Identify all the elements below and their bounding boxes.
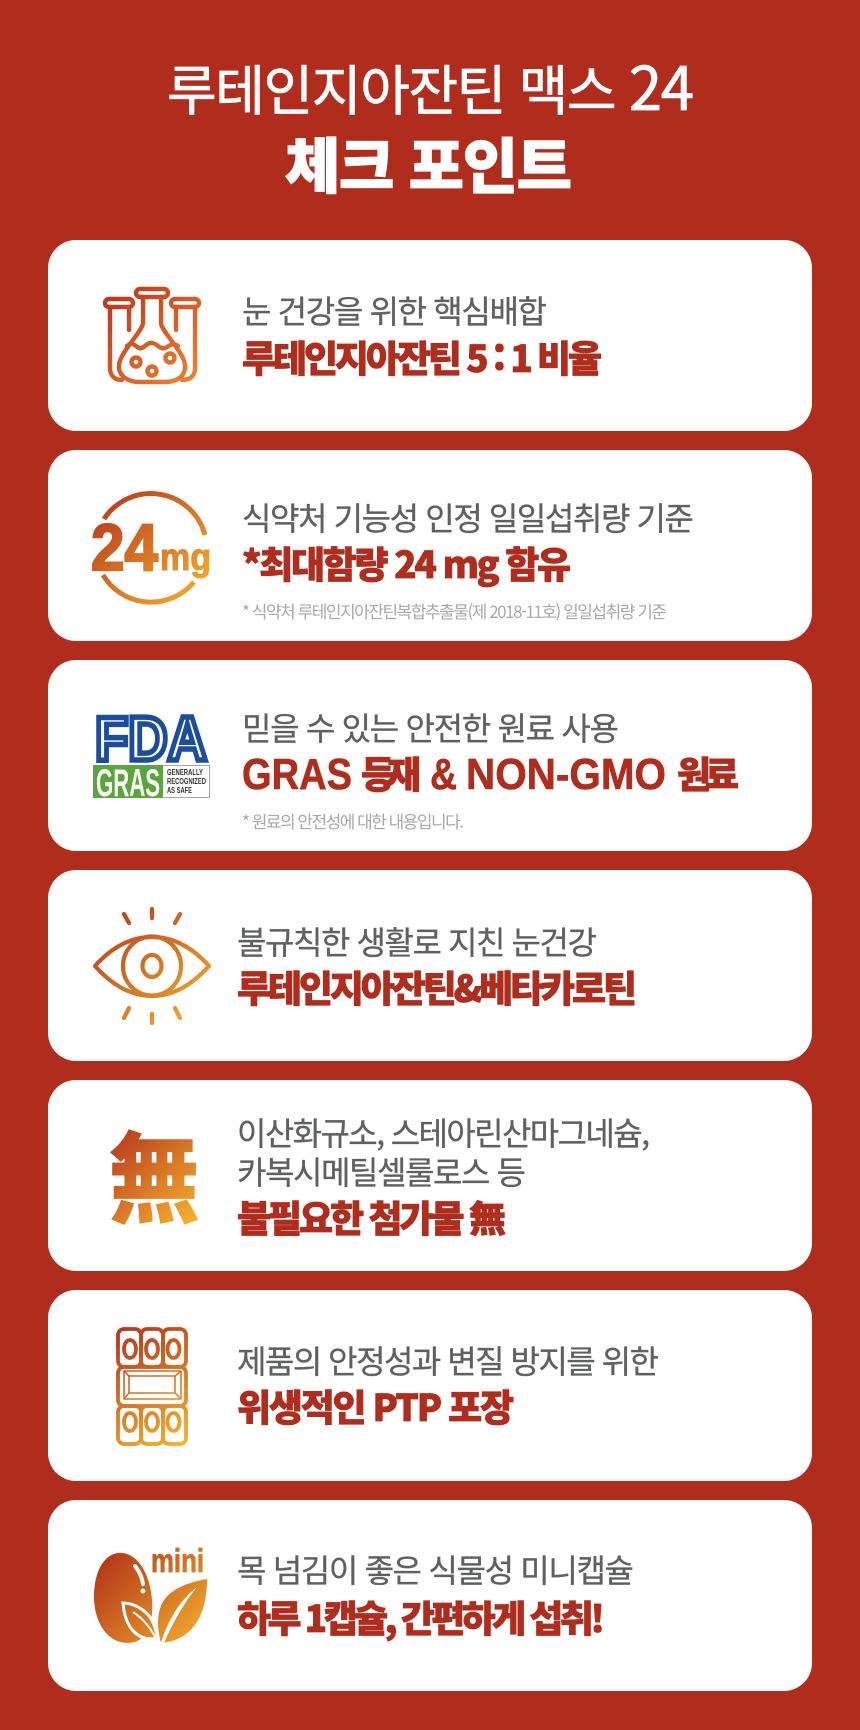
icon: FDA GRAS logo: GENERALLY xyxy=(167,768,203,777)
heading line: 믿을 수 있는 안전한 원료 사용 xyxy=(242,704,619,750)
icon: mini capsule and leaves xyxy=(94,1542,207,1643)
title xyxy=(167,41,694,206)
heading lines: 카복시메틸셀룰로스 등 xyxy=(237,1148,526,1194)
icon: flasks xyxy=(105,289,199,382)
bold line: 루테인지아잔틴 5 : 1 비율 xyxy=(242,329,602,383)
panel: card 4 eye xyxy=(48,870,812,1061)
bold line: 등재 xyxy=(361,745,421,799)
panel: card 6 PTP xyxy=(48,1290,812,1481)
icon: FDA GRAS logo: AS SAFE xyxy=(167,786,192,795)
icon: eye xyxy=(95,909,209,1023)
icon: FDA GRAS logo: GRAS xyxy=(96,762,160,805)
icon: 24mg badge: mg xyxy=(160,537,211,579)
footnote: * 원료의 안전성에 대한 내용입니다. xyxy=(242,808,464,833)
heading lines xyxy=(237,1109,650,1194)
bold line: NON-GMO xyxy=(466,750,666,799)
panel: card 5 no additives xyxy=(48,1080,812,1271)
bold line: & xyxy=(430,750,457,799)
panel: card 2 24 mg xyxy=(48,450,812,641)
panel: card 1 lutein ratio xyxy=(48,240,812,431)
panel: card 7 mini capsule xyxy=(48,1500,812,1691)
icon: PTP blister pack xyxy=(118,1329,186,1444)
bold line xyxy=(242,745,739,799)
icon: FDA GRAS logo: FDA xyxy=(95,705,207,774)
title: 체크 포인트 xyxy=(285,119,572,206)
icon: 24mg badge: 24 xyxy=(91,510,158,584)
bold line: 위생적인 PTP 포장 xyxy=(237,1378,514,1432)
heading line: 눈 건강을 위한 핵심배합 xyxy=(242,287,547,333)
panel: card 3 GRAS xyxy=(48,660,812,851)
bold line: GRAS xyxy=(242,750,352,799)
icon: 24mg badge xyxy=(91,494,211,602)
bold line: 원료 xyxy=(677,745,739,799)
icon: FDA GRAS logo xyxy=(93,705,210,805)
icon: no-additive character: 無 xyxy=(108,1099,200,1244)
bold line: 불필요한 첨가물 無 xyxy=(237,1189,506,1243)
heading lines: 이산화규소, 스테아린산마그네슘, xyxy=(237,1109,650,1155)
bold line: *최대함량 24 mg 함유 xyxy=(242,535,571,589)
bold line: 루테인지아잔틴&베타카로틴 xyxy=(237,959,637,1013)
heading line: 제품의 안정성과 변질 방지를 위한 xyxy=(237,1337,659,1383)
title: 루테인지아잔틴 맥스 24 xyxy=(167,41,694,128)
heading line: 불규칙한 생활로 지친 눈건강 xyxy=(237,918,597,964)
heading line: 식약처 기능성 인정 일일섭취량 기준 xyxy=(242,494,694,540)
footnote: * 식약처 루테인지아잔틴복합추출물(제 2018-11호) 일일섭취량 기준 xyxy=(242,598,667,623)
icon: FDA GRAS logo: RECOGNIZED xyxy=(167,777,206,786)
bold line: 하루 1캡슐, 간편하게 섭취! xyxy=(237,1589,605,1643)
icon: mini capsule and leaves: mini xyxy=(151,1542,204,1579)
heading line: 목 넘김이 좋은 식물성 미니캡슐 xyxy=(237,1546,634,1592)
